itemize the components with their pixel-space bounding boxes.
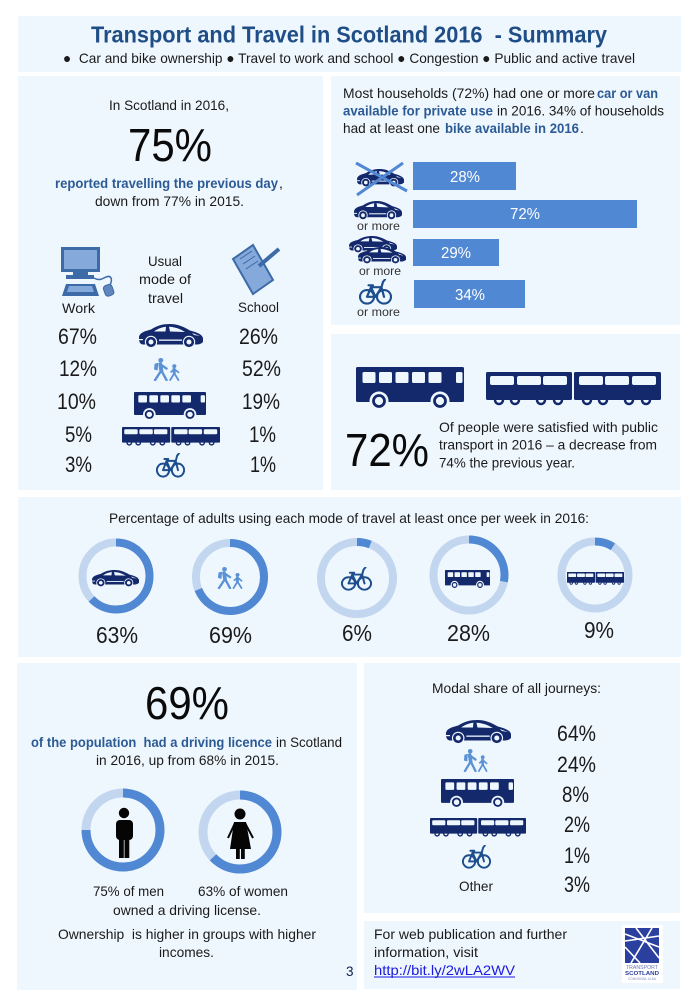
row: car: 67% — [58, 324, 97, 349]
row: walking: 12% — [59, 356, 97, 381]
panel: driving licence — [17, 663, 357, 990]
bar: bike 34% — [414, 280, 525, 308]
donut: car 63%: 63% — [96, 622, 138, 648]
text block: household availability: had at least one — [343, 120, 440, 136]
donut: bike 6% — [321, 542, 393, 646]
panel: further information — [364, 921, 680, 989]
panel: public transport satisfaction — [331, 334, 680, 490]
bar: two or more cars 29%: 29% — [441, 245, 471, 262]
icon: two cars or more — [349, 236, 406, 278]
driving licence text: of the population had a driving licence — [31, 734, 272, 750]
icon: bike or more: or more — [357, 307, 400, 319]
icon: bus — [356, 367, 464, 410]
icon: bike or more — [357, 279, 400, 319]
donut: walking 69% — [196, 543, 264, 648]
donut: train 9% — [562, 542, 628, 643]
heading: usual mode of travel — [139, 253, 191, 306]
logo: Transport Scotland — [622, 925, 663, 983]
row: car: 26% — [239, 324, 278, 349]
panel: weekly mode use — [18, 497, 681, 657]
icon: no car — [356, 163, 407, 195]
row: train — [65, 422, 276, 447]
icon: notepad and pencil — [233, 245, 279, 294]
donut: car 63% — [82, 542, 150, 648]
donut: bus 28% — [434, 540, 504, 646]
row: bike: 3% — [65, 452, 92, 477]
text block: household availability: bike available in 2016 — [445, 120, 579, 136]
row: train 2% — [430, 812, 590, 837]
label: school: School — [238, 299, 279, 315]
donut: bus 28%: 28% — [447, 620, 490, 646]
row: bike — [65, 452, 276, 477]
donut: men 75% — [86, 793, 160, 867]
bar: no car 28% — [413, 162, 516, 190]
logo: Transport Scotland: TRANSPORT — [626, 965, 659, 971]
row: train 2%: 2% — [564, 812, 590, 837]
big stat 72%: 72% — [345, 424, 429, 476]
text: men and women licence — [93, 883, 288, 918]
row: bus: 10% — [57, 389, 96, 414]
donut: bike 6%: 6% — [342, 620, 372, 646]
intro text: In Scotland in 2016, — [109, 97, 229, 113]
icon: man — [116, 808, 133, 858]
row: car 64% — [446, 720, 596, 746]
icon: one car or more — [354, 201, 402, 233]
row: walking — [59, 356, 281, 381]
big stat 75%: 75% — [128, 119, 212, 171]
satisfaction text — [439, 419, 658, 470]
bar: two or more cars 29% — [413, 239, 499, 266]
donut: women 63% — [203, 795, 277, 869]
travelled previous day text: down from 77% in 2015. — [95, 193, 244, 209]
travelled previous day text: reported travelling the previous day — [55, 175, 278, 191]
heading: usual mode of travel: travel — [148, 290, 183, 306]
icon: computer — [61, 247, 115, 297]
donut: walking 69%: 69% — [209, 622, 252, 648]
row: bus: 19% — [242, 389, 280, 414]
row: bike 1% — [463, 843, 590, 868]
page number: 3 — [346, 964, 354, 979]
row: walking 24%: 24% — [557, 752, 596, 777]
icon: one car or more: or more — [357, 221, 400, 233]
text block: household availability: available for private use — [343, 102, 493, 118]
title: Transport and Travel in Scotland 2016 - Summary — [91, 22, 607, 48]
row: other 3%: Other — [459, 878, 493, 894]
heading: modal share: Modal share of all journeys: — [432, 680, 601, 696]
panel: modal share — [364, 663, 680, 913]
heading: usual mode of travel: mode of — [139, 271, 191, 287]
row: bus 8%: 8% — [562, 782, 589, 807]
driving licence text — [31, 734, 342, 768]
driving licence text: in 2016, up from 68% in 2015. — [96, 752, 279, 768]
heading: weekly use: Percentage of adults using each mode of travel at least once per week in 2016: — [109, 510, 589, 526]
bar: no car 28%: 28% — [450, 169, 480, 186]
row: bike: 1% — [250, 452, 276, 477]
text: further information: For web publication and further — [374, 926, 567, 942]
text: men and women licence: 63% of women — [198, 883, 288, 899]
text: further information: information, visit — [374, 944, 478, 960]
row: walking 24% — [464, 749, 596, 777]
icon: two cars or more: or more — [359, 266, 401, 278]
text: men and women licence: 75% of men — [93, 883, 164, 899]
text block: household availability: Most households (72%) had one or more — [343, 85, 595, 101]
heading: usual mode of travel: Usual — [148, 253, 182, 269]
panel: household car and bike availability — [331, 76, 680, 325]
row: bus — [57, 389, 280, 421]
row: car — [58, 324, 278, 349]
travelled previous day text — [55, 175, 283, 209]
row: walking: 52% — [242, 356, 281, 381]
text block: household availability: in 2016. 34% of households — [497, 102, 664, 118]
satisfaction text: Of people were satisfied with public — [439, 419, 658, 435]
text block: household availability: . — [580, 120, 584, 136]
row: other 3%: 3% — [564, 872, 590, 897]
bar: bike 34%: 34% — [455, 287, 485, 304]
row: train: 5% — [65, 422, 92, 447]
text: further information — [374, 926, 567, 978]
logo: Transport Scotland: SCOTLAND — [625, 971, 659, 977]
bar: one or more cars 72%: 72% — [510, 206, 540, 223]
big stat 69%: 69% — [145, 677, 229, 729]
row: car 64%: 64% — [557, 721, 596, 746]
driving licence text: in Scotland — [276, 734, 342, 750]
panel: header — [18, 16, 681, 72]
travelled previous day text: , — [279, 175, 283, 191]
text: further information: http://bit.ly/2wLA2WV — [374, 962, 516, 978]
panel: usual mode of travel — [18, 76, 323, 490]
text: men and women licence: owned a driving license. — [113, 902, 261, 918]
text: ownership by income: Ownership is higher in groups with higher — [58, 926, 316, 942]
text: ownership by income — [58, 926, 316, 960]
row: train: 1% — [249, 422, 276, 447]
logo: Transport Scotland: CÒMHDHAIL ALBA — [628, 976, 656, 981]
row: other 3% — [459, 872, 590, 897]
text: ownership by income: incomes. — [159, 944, 214, 960]
subtitle topics: ● Car and bike ownership ● Travel to work and school ● Congestion ● Public and active travel — [63, 50, 635, 66]
bar: one or more cars 72% — [413, 200, 637, 228]
icon: woman — [228, 808, 253, 859]
row: bus 8% — [441, 779, 589, 809]
satisfaction text: 74% the previous year. — [439, 454, 575, 470]
text block: household availability: car or van — [597, 85, 658, 101]
row: bike 1%: 1% — [564, 843, 590, 868]
icon: train — [486, 372, 661, 404]
donut: train 9%: 9% — [584, 617, 614, 643]
satisfaction text: transport in 2016 – a decrease from — [439, 436, 657, 452]
label: work: Work — [62, 300, 96, 316]
text block: household availability — [343, 85, 664, 136]
